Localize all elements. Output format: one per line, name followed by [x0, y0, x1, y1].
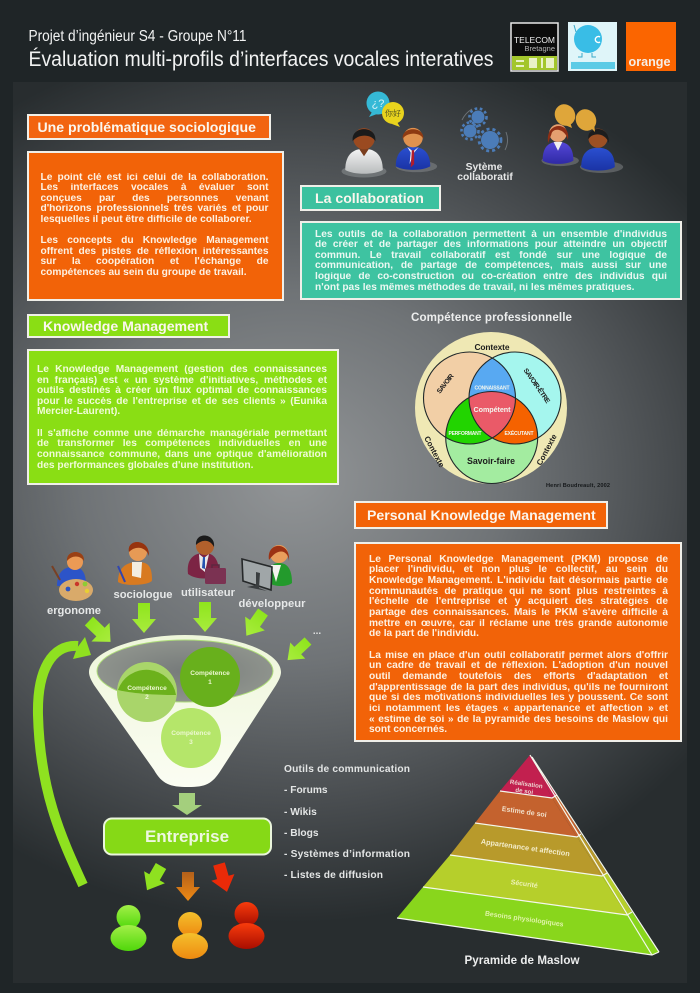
label: système collaboratif: Sytème	[466, 162, 503, 173]
intersection: exécutant	[493, 399, 538, 444]
label: système collaboratif	[457, 162, 513, 183]
label: Pyramide de Maslow: Pyramide de Maslow	[464, 954, 580, 967]
speech bubble: cyan	[366, 92, 390, 117]
arrow: orange to user	[176, 872, 200, 901]
circle: compétence 1: Compétence	[190, 670, 230, 677]
circle: savoir-être	[469, 352, 561, 444]
circle: compétence 3	[161, 708, 221, 768]
speech bubble: yellow: 你好	[385, 108, 401, 119]
circle: compétence 3: 3	[189, 739, 193, 746]
arrow: développeur to funnel	[237, 605, 273, 643]
outer circle: contexte	[415, 332, 567, 484]
panel: problématique text	[27, 151, 284, 301]
illustration: collaboration people and gears	[342, 92, 624, 183]
venn labels: SAVOIR	[436, 373, 456, 395]
pyramid level: réalisation de soi	[500, 755, 557, 798]
logo: Orange	[626, 22, 676, 71]
speech bubbles: gold	[551, 100, 600, 135]
venn labels: Savoir-faire	[467, 456, 515, 466]
pyramid level: estime de soi: Estime de soi	[501, 806, 547, 819]
profile: utilisateur	[188, 535, 226, 584]
heading: La collaboration	[300, 185, 441, 211]
pyramid level: sécurité: Sécurité	[510, 879, 538, 890]
person: woman	[542, 124, 579, 166]
user: orange	[172, 912, 208, 959]
profile: développeur	[242, 545, 292, 591]
chart: venn diagram of professional competence	[411, 311, 610, 489]
logo: Orange: orange	[628, 54, 670, 69]
speech bubble: yellow	[382, 102, 404, 127]
person: man in blue	[396, 128, 437, 172]
venn labels: PERFORMANT	[448, 431, 482, 437]
venn labels: Henri Boudreault, 2002	[546, 483, 610, 489]
intersection: performant	[446, 398, 492, 444]
arrow: sociologue to funnel	[132, 603, 156, 633]
heading: Knowledge Management	[27, 314, 230, 338]
header title	[28, 28, 494, 71]
profile: sociologue	[118, 542, 152, 585]
logo: Telecom Bretagne: TELECOM	[514, 35, 555, 45]
pyramid level: réalisation de soi: Réalisation	[509, 779, 543, 790]
pyramid level: sécurité	[423, 855, 632, 915]
heading: La collaboration: La collaboration	[315, 190, 424, 206]
arrow: ergonome to funnel	[80, 612, 120, 651]
label: système collaboratif: collaboratif	[457, 172, 513, 183]
panel: collaboration text	[300, 221, 682, 300]
logo: laboratory mascot	[568, 22, 617, 71]
profile: ergonome	[52, 552, 93, 601]
circle: compétence 1: 1	[208, 679, 212, 686]
pyramid level: besoins physiologiques	[397, 887, 659, 955]
chart title: Compétence professionnelle	[411, 311, 573, 324]
venn labels: Contexte	[422, 435, 446, 469]
venn labels: EXÉCUTANT	[504, 429, 534, 437]
label: utilisateur: utilisateur	[181, 587, 236, 599]
pyramid level: réalisation de soi: de soi	[515, 787, 534, 796]
venn labels: Compétent	[474, 405, 511, 414]
heading: Personal Knowledge Management: Personal Knowledge Management	[367, 507, 596, 523]
icon: gears	[462, 108, 507, 151]
circle: compétence 1	[180, 647, 240, 707]
pyramid level: estime de soi	[475, 791, 581, 837]
box: entreprise: Entreprise	[145, 827, 229, 846]
list: communication tools: - Blogs	[284, 828, 319, 839]
list: communication tools: - Systèmes d’information	[284, 849, 410, 860]
logo: Telecom Bretagne: Bretagne	[525, 44, 555, 53]
venn labels: Contexte	[474, 342, 510, 352]
pyramid level: appartenance et affection: Appartenance et affection	[480, 837, 570, 858]
list: communication tools: - Listes de diffusion	[284, 870, 383, 881]
intersection: compétent	[470, 392, 515, 438]
label: développeur: développeur	[238, 598, 306, 610]
circle: compétence 2: Compétence	[127, 685, 167, 692]
person: woman in white	[342, 128, 386, 178]
intersection: connaissant	[470, 358, 515, 398]
header title: Projet d’ingénieur S4 - Groupe N°11	[28, 28, 246, 45]
pyramid level: besoins physiologiques: Besoins physiologiques	[484, 911, 564, 929]
label: ergonome: ergonome	[47, 605, 101, 617]
circle: compétence 3: Compétence	[171, 730, 211, 737]
label: ellipsis: ...	[313, 626, 321, 637]
arrow: ellipsis to funnel	[280, 633, 316, 668]
heading: Knowledge Management: Knowledge Management	[43, 318, 208, 334]
user: red	[228, 902, 264, 949]
heading: Personal Knowledge Management	[354, 501, 608, 529]
user: green	[110, 905, 146, 951]
panel: knowledge management text	[27, 349, 339, 485]
label: sociologue: sociologue	[114, 589, 172, 601]
circle: compétence 2	[117, 662, 177, 722]
box: entreprise	[104, 818, 271, 854]
arrow: red to user	[207, 861, 239, 895]
heading: Une problématique sociologique	[27, 114, 271, 140]
venn labels: SAVOIR-ÊTRE	[522, 366, 553, 405]
arrow: funnel to enterprise	[172, 793, 202, 815]
logo: Telecom Bretagne	[511, 23, 558, 71]
circle: compétence 2: 2	[145, 694, 149, 701]
venn labels	[422, 342, 610, 489]
speech bubble: cyan: ¿?	[372, 98, 384, 110]
venn labels: Contexte	[535, 432, 559, 467]
logos	[510, 22, 676, 72]
heading: Une problématique sociologique: Une problématique sociologique	[38, 119, 256, 135]
list: communication tools: - Wikis	[284, 807, 317, 818]
list: communication tools: Outils de communication	[284, 764, 410, 775]
person: man	[580, 129, 623, 173]
list: communication tools: - Forums	[284, 785, 328, 796]
venn labels: CONNAISSANT	[474, 386, 510, 392]
circle: savoir	[424, 352, 516, 444]
pyramid level: appartenance et affection	[450, 823, 607, 876]
arrow: curved feedback	[38, 637, 91, 885]
arrow: utilisateur to funnel	[193, 602, 217, 632]
circle: savoir-faire	[446, 392, 538, 484]
funnel	[89, 635, 281, 787]
arrow: green to user	[137, 860, 171, 896]
panel: PKM text	[354, 542, 682, 742]
